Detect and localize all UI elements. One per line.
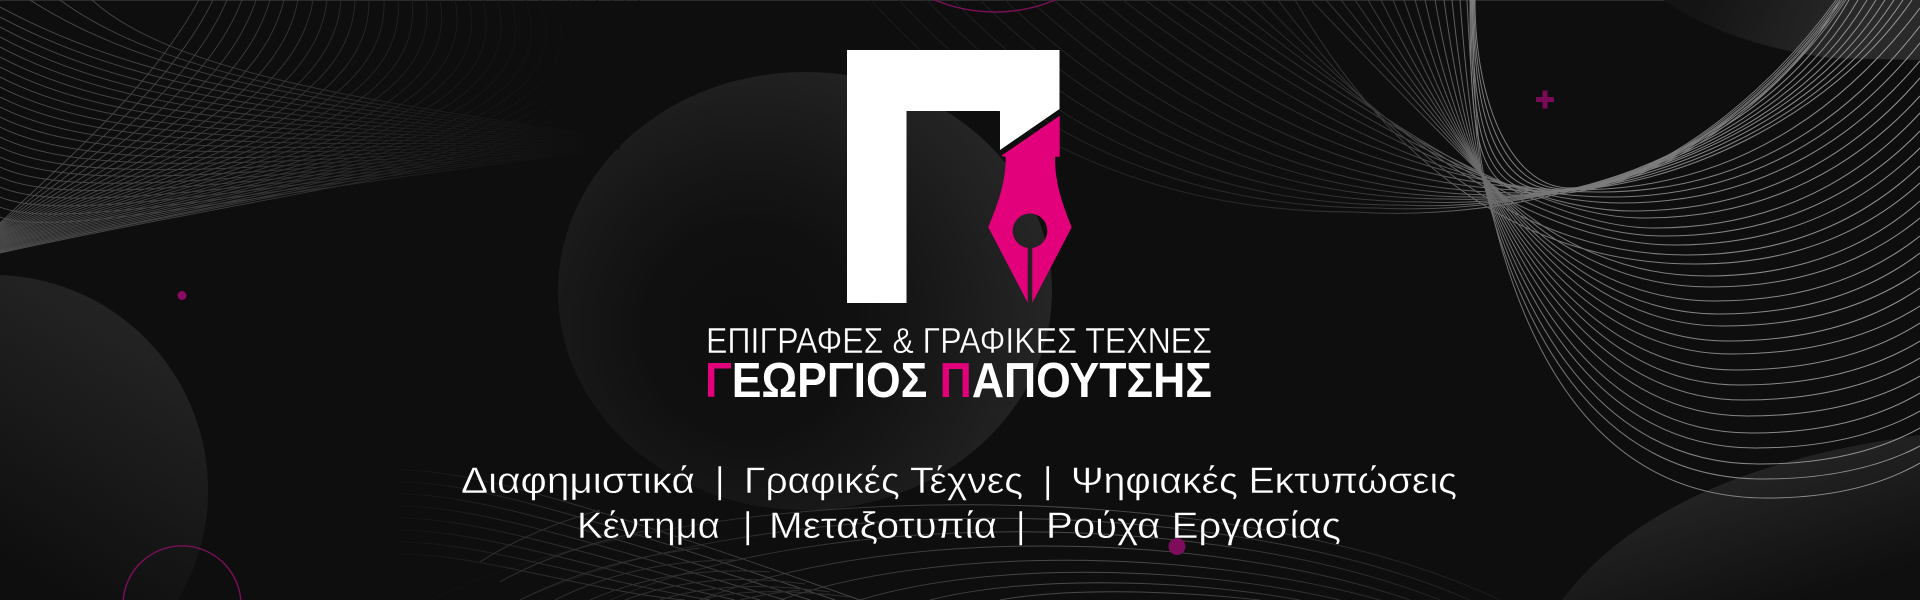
pink plus [1536, 90, 1554, 108]
logo mark [847, 50, 1072, 303]
services line 2: Μεταξοτυπία [769, 505, 997, 546]
services line 1: | [715, 460, 725, 501]
services line 2: | [1016, 505, 1026, 546]
heading: trade name: ΕΠΙΓΡΑΦΕΣ & ΓΡΑΦΙΚΕΣ ΤΕΧΝΕΣ [706, 320, 1212, 361]
services line 2: Ρούχα Εργασίας [1046, 505, 1341, 546]
logo: white gamma [847, 50, 1060, 303]
services line 1: | [1043, 460, 1053, 501]
large centre circle [558, 72, 1052, 510]
line bundle: bright hairpin [1470, 0, 1846, 194]
logo: pink pen nib [988, 116, 1072, 303]
line family: bottom descending mesh [400, 470, 860, 600]
pink arc: top [935, 0, 1055, 12]
large left circle [0, 275, 208, 600]
pink dot: left [178, 291, 186, 300]
services line 2: | [743, 505, 753, 546]
line mesh: top left, family A [0, 0, 652, 253]
line family: right wave [871, 0, 1920, 498]
services line 1: Ψηφιακές Εκτυπώσεις [1071, 460, 1457, 501]
pink ring: bottom left [123, 546, 241, 600]
services line 2 [577, 505, 1341, 546]
services line 1: Γραφικές Τέχνες [744, 460, 1023, 501]
bottom right blob [1562, 435, 1920, 600]
pink dot: bottom [1168, 538, 1186, 555]
top right blob [1663, 0, 1920, 60]
services line 1 [461, 460, 1457, 501]
services line 2: Κέντημα [577, 505, 720, 546]
line mesh: top left, family B [0, 0, 620, 222]
services line 1: Διαφημιστικά [461, 460, 695, 501]
top edge highlight [0, 0, 1920, 1]
line family: bottom domes [430, 505, 1500, 600]
line family: bottom rising hatch [480, 510, 850, 600]
heading: owner name: ΓΕΩΡΓΙΟΣ ΠΑΠΟΥΤΣΗΣ [705, 354, 1212, 408]
